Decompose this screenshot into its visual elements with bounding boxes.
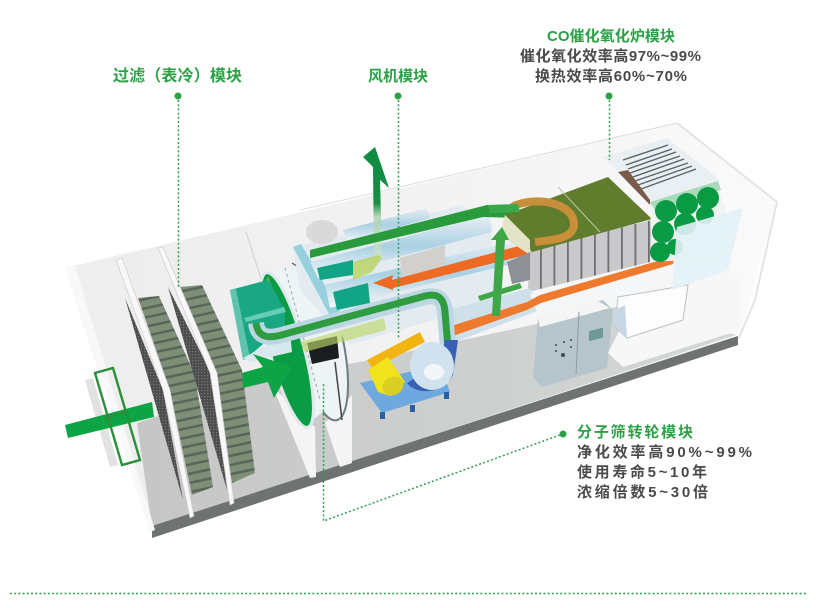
rotor stat line 1: 净化效率高90%~99% [577,443,752,461]
fan unit [360,332,458,419]
catalytic bed mesh block [507,252,530,284]
label: molecular sieve rotor module [324,383,752,521]
translucent side panel [672,208,743,290]
CO stat line 2: 换热效率高60%~70% [535,67,687,85]
vertical green arrow [491,227,509,316]
label: fan module [368,67,428,338]
CO leader line [606,92,612,160]
white frame behind damper [85,378,118,467]
filter module 1 [116,258,213,518]
exhaust arrow [363,147,389,260]
control cabinet [533,300,613,387]
orange arrow [373,243,530,290]
teal module boxes [317,260,370,310]
white storage platform [608,270,742,367]
teal inlet box [230,280,292,362]
fan heading: 风机模块 [368,67,428,85]
white partition walls [246,232,352,478]
louver heat exchanger top [602,138,720,205]
green damper frame [95,368,140,465]
label: CO catalytic oxidation furnace module [520,27,701,160]
rotor stat line 2: 使用寿命5~10年 [577,463,707,481]
filter heading: 过滤（表冷）模块 [113,66,242,85]
green arrow into rotor [242,354,292,398]
CO heading: CO催化氧化炉模块 [547,27,675,45]
green heat exchanger cells [650,181,725,262]
rotor stat line 3: 浓缩倍数5~30倍 [577,483,708,501]
filter leader line [174,92,182,288]
yellow-green heat block [353,255,382,280]
label: filter / cooling module [113,66,242,288]
catalytic module [488,177,652,292]
CO stat line 1: 催化氧化效率高97%~99% [520,47,701,65]
green inlet arrow (left) [65,402,154,438]
fan leader line [394,92,402,338]
equipment container illustration [65,123,777,538]
molecular sieve rotor wheel [250,259,359,432]
filter module 2 [158,247,255,505]
container shell [65,123,777,538]
green upper flow [310,205,517,258]
blue-white duct frame [293,205,520,345]
lower air pipes [448,272,680,340]
rotor heading: 分子筛转轮模块 [577,423,693,441]
green lower duct [256,295,449,360]
bottom divider [10,592,807,594]
orange lower flow [448,256,675,337]
rotor leader line [324,383,566,521]
